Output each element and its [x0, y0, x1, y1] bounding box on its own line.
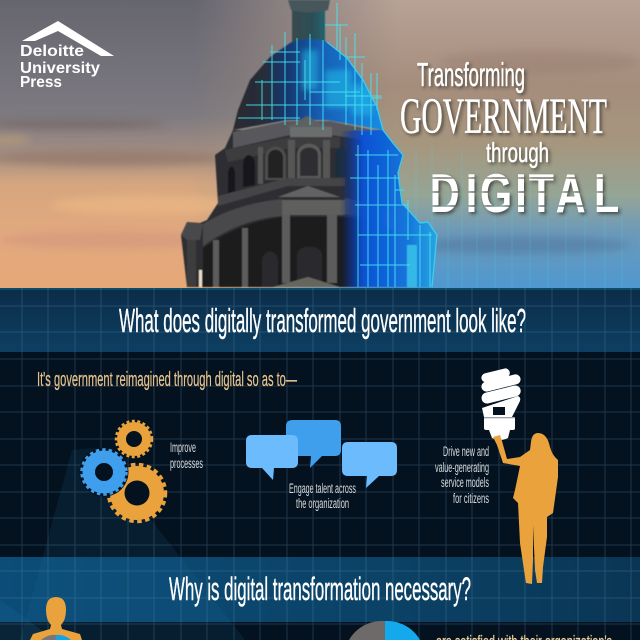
logo wordmark	[20, 43, 100, 91]
label: drive new models: Drive new and	[443, 444, 489, 459]
entablature curve	[203, 199, 282, 246]
sky gaps between columns	[199, 245, 417, 287]
icon: blue gear	[80, 448, 128, 496]
logo wordmark: Deloitte	[20, 43, 84, 60]
icon: speech bubbles	[246, 420, 397, 488]
right bubble	[342, 442, 397, 488]
icon: person with pie chart	[30, 597, 82, 640]
hero title: DIGITAL	[430, 163, 619, 224]
colonnade interior	[203, 217, 418, 287]
building blue digital wash	[340, 130, 437, 287]
subheading: It's government reimagined through digital so as to—	[37, 369, 297, 391]
dome bright glow	[302, 50, 372, 115]
chest pie	[41, 635, 71, 640]
building lower body	[181, 130, 437, 287]
building lantern	[288, 0, 330, 44]
icon: woman silhouette	[493, 433, 558, 584]
icon: gears	[80, 421, 166, 522]
logo wordmark: Press	[20, 74, 62, 91]
hero title: through	[486, 137, 549, 168]
icon: large orange gear	[108, 464, 166, 522]
hero title	[400, 56, 619, 224]
label: engage talent	[289, 481, 356, 511]
label: engage talent: the organization	[296, 496, 349, 511]
label: improve processes: Improve	[170, 440, 196, 455]
hero: sky background	[0, 0, 640, 288]
building cyan outline	[327, 42, 437, 287]
drum windows	[228, 144, 347, 193]
left bubble	[246, 435, 298, 480]
hero: digital light streaks	[416, 145, 622, 288]
building digital wireframe overlay	[238, 3, 432, 287]
label: drive new models: for citizens	[453, 491, 489, 506]
building stone details	[181, 116, 420, 287]
icon: light bulb	[480, 367, 522, 440]
hero: capitol building	[181, 0, 437, 287]
middle bubble	[286, 420, 341, 468]
logo: Deloitte University Press	[20, 21, 114, 91]
logo wordmark: University	[20, 60, 100, 77]
label: drive new models: value-generating	[435, 460, 489, 475]
label: improve processes	[170, 440, 203, 471]
building dome	[233, 39, 383, 130]
label: drive new models: service models	[441, 475, 489, 490]
label: improve processes: processes	[170, 456, 203, 471]
label: drive new models	[435, 444, 489, 506]
chart: satisfaction pie	[349, 621, 420, 640]
icon: top orange gear	[116, 421, 152, 457]
dark blueprint background	[0, 288, 640, 640]
logo roof icon	[22, 21, 114, 56]
label: engage talent: Engage talent across	[289, 481, 356, 496]
hero title: Transforming	[417, 56, 525, 93]
person silhouette	[30, 597, 82, 640]
